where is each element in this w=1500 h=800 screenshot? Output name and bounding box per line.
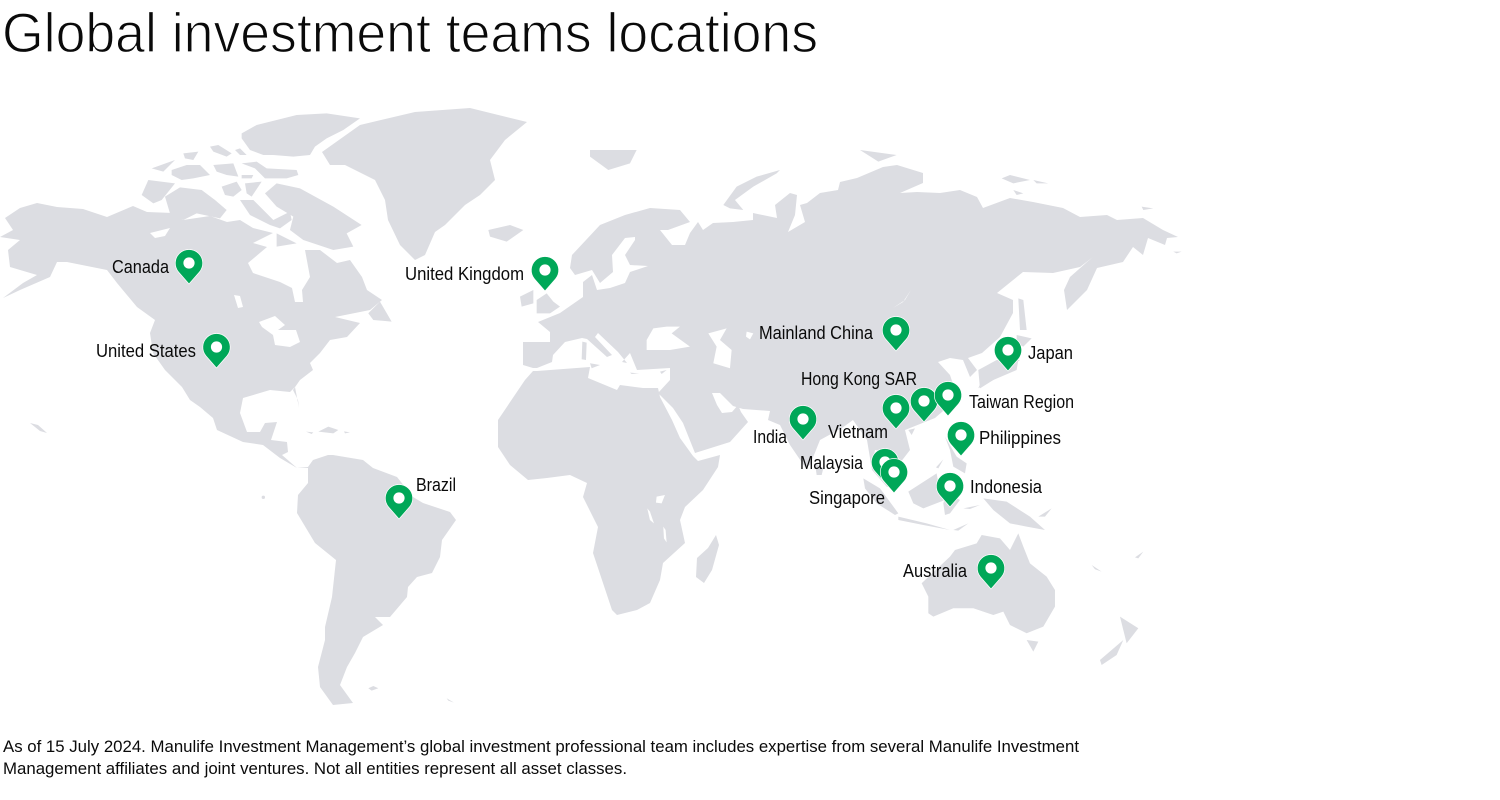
label: Hong Kong SAR: Hong Kong SAR bbox=[801, 369, 917, 389]
pin: Hong Kong SAR bbox=[910, 388, 938, 422]
label: Vietnam: Vietnam bbox=[828, 422, 888, 442]
label: Indonesia: Indonesia bbox=[970, 477, 1043, 497]
label: Canada: Canada bbox=[112, 257, 170, 277]
pin: Indonesia bbox=[936, 472, 964, 507]
label: Philippines: Philippines bbox=[979, 428, 1061, 448]
label: United Kingdom: United Kingdom bbox=[405, 264, 524, 284]
Madagascar bbox=[696, 535, 719, 583]
footnote bbox=[3, 737, 1079, 778]
Australia bbox=[922, 533, 1138, 665]
footnote: As of 15 July 2024. Manulife Investment Management’s global investment professional team includes expertise from several Manulife Investment bbox=[3, 737, 1079, 756]
Great Lakes and Canadian lakes bbox=[150, 228, 312, 347]
Caribbean and small Atlantic islands bbox=[262, 427, 454, 703]
label: Taiwan Region: Taiwan Region bbox=[969, 392, 1074, 412]
North America bbox=[0, 203, 382, 468]
pin: Brazil bbox=[385, 484, 413, 519]
Canadian Arctic islands bbox=[142, 113, 360, 228]
label: Australia: Australia bbox=[903, 561, 968, 581]
Southeast Asia and Oceania islands bbox=[815, 360, 1143, 572]
label: United States: United States bbox=[96, 341, 196, 361]
pin: Singapore bbox=[880, 458, 908, 493]
pin: India bbox=[789, 406, 817, 440]
label: Singapore: Singapore bbox=[809, 488, 885, 508]
pin: United Kingdom bbox=[531, 256, 559, 291]
Russian Arctic and Pacific islands, Japan bbox=[860, 150, 1182, 388]
pin: Japan bbox=[994, 336, 1022, 371]
title: Global investment teams locations bbox=[2, 1, 818, 64]
pin: Philippines bbox=[947, 422, 975, 456]
seas inside Eurasia bbox=[647, 327, 753, 368]
Baffin, Southampton and Newfoundland bbox=[265, 183, 392, 322]
Greenland bbox=[322, 108, 527, 260]
Africa bbox=[498, 367, 720, 615]
European and Mediterranean islands bbox=[488, 150, 780, 374]
label: Malaysia: Malaysia bbox=[800, 453, 864, 473]
South America bbox=[297, 455, 456, 705]
label: India: India bbox=[753, 427, 788, 447]
Lake Baikal bbox=[893, 290, 911, 308]
pin: United States bbox=[203, 334, 230, 368]
pin: Malaysia bbox=[871, 448, 899, 483]
pin: Taiwan Region bbox=[934, 382, 962, 416]
Hawaii bbox=[30, 423, 47, 433]
pin: Mainland China bbox=[882, 316, 910, 351]
pin: Vietnam bbox=[882, 394, 910, 429]
label: Japan: Japan bbox=[1028, 343, 1073, 363]
location pins and labels bbox=[96, 250, 1074, 589]
pin: Australia bbox=[977, 554, 1005, 589]
pin: Canada bbox=[175, 250, 203, 284]
Eurasia bbox=[523, 165, 1178, 487]
African lakes bbox=[647, 495, 667, 542]
label: Mainland China: Mainland China bbox=[759, 323, 874, 343]
footnote: Management affiliates and joint ventures. Not all entities represent all asset classes. bbox=[3, 759, 627, 778]
world map bbox=[0, 108, 1182, 705]
label: Brazil: Brazil bbox=[416, 475, 456, 495]
